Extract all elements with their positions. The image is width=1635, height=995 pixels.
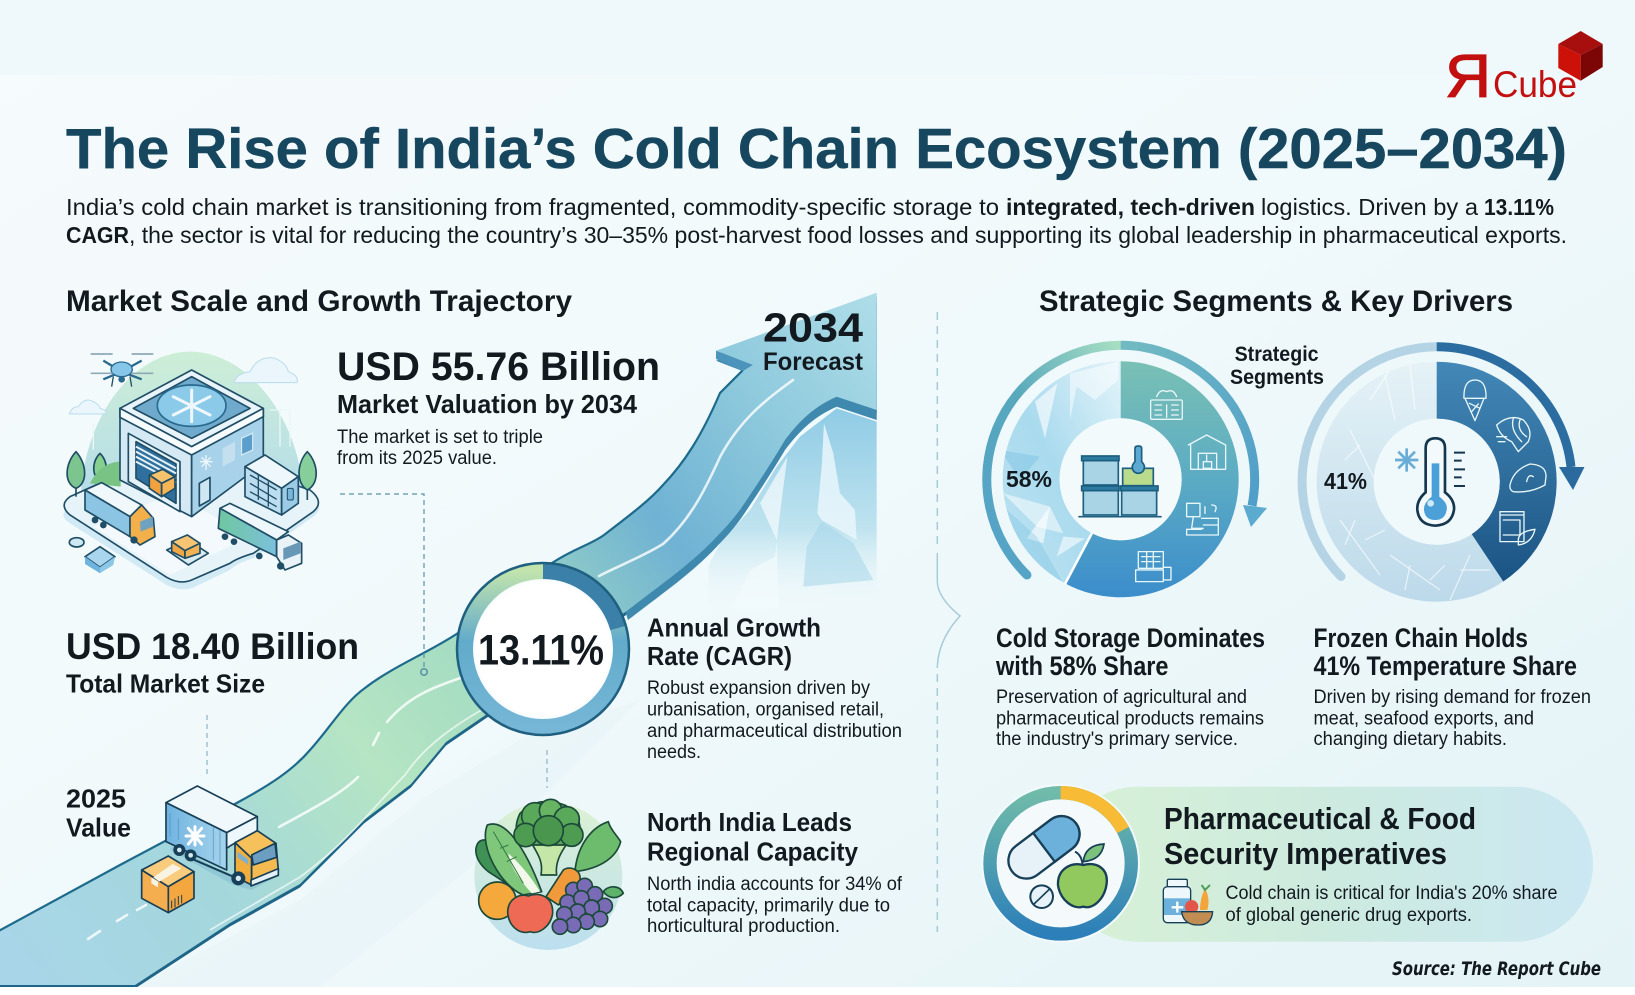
- wind turbines: [93, 410, 290, 450]
- text: cold storage dominates: Cold Storage Dominates: [996, 623, 1265, 653]
- text: frozen chain holds: changing dietary habits.: [1314, 729, 1507, 750]
- pallet boxes: [167, 535, 208, 565]
- top band: [0, 0, 1635, 75]
- truck right: [218, 503, 302, 570]
- callout: USD 55.76 Billion: USD 55.76 Billion: [337, 345, 660, 389]
- text: north india: total capacity, primarily due to: [647, 896, 890, 916]
- road edge lower: [0, 296, 877, 988]
- outer arc left: [987, 345, 1121, 575]
- orange: [479, 882, 516, 919]
- left leaves: [476, 824, 542, 895]
- text: north india: North India Leads: [647, 807, 852, 837]
- truck: [166, 786, 278, 890]
- road centre line: [88, 380, 793, 939]
- growth road arrow: [0, 293, 877, 988]
- parcel: [142, 856, 194, 913]
- apple: [508, 895, 553, 932]
- arc arrowhead: [1243, 505, 1267, 527]
- pharma body text: [1226, 883, 1558, 926]
- pharma body text: of global generic drug exports.: [1226, 905, 1472, 926]
- intro paragraph: 13.11%: [1484, 194, 1554, 220]
- illustration: truck and parcel: [142, 786, 278, 913]
- logo: [1445, 31, 1603, 110]
- pill background: [1060, 787, 1593, 942]
- arrow wing fold: [716, 351, 753, 371]
- intro paragraph: [66, 194, 1567, 248]
- text: annual growth rate: Annual Growth: [647, 612, 821, 642]
- illustration: fruit and vegetables: [474, 799, 623, 950]
- icons: frozen products: [1464, 380, 1546, 545]
- callout: USD 55.76 Billion: Market Valuation by 2034: [337, 389, 638, 419]
- pharma heading: [1164, 801, 1476, 871]
- ring upper-right arc: [543, 571, 618, 628]
- label: strategic segments: Strategic: [1235, 343, 1319, 366]
- text: north india: North india accounts for 34% of: [647, 874, 903, 895]
- centre disc: [1374, 419, 1500, 545]
- text: north india: Regional Capacity: [647, 836, 858, 866]
- road surface: [0, 293, 877, 985]
- callout: USD 55.76 Billion: [337, 345, 660, 469]
- text: cold storage dominates: Preservation of agricultural and: [996, 687, 1247, 708]
- divider between columns: [937, 312, 960, 932]
- ice mountains behind arrow: [708, 408, 877, 610]
- icon: bottle and bowl: [1163, 879, 1213, 925]
- connector: 2025 value: [206, 715, 208, 776]
- logo wordmark: Я: [1445, 43, 1491, 110]
- centre disc: [1060, 418, 1182, 540]
- text: annual growth rate: [647, 612, 902, 763]
- truck left: [85, 483, 155, 545]
- icon: capsule: [1001, 809, 1087, 886]
- broccoli: [514, 799, 583, 875]
- callout: USD 18.40 Billion: Total Market Size: [66, 668, 265, 698]
- dome backdrop: [81, 352, 303, 503]
- pill icon ring: [981, 784, 1140, 943]
- ring band: [465, 571, 621, 727]
- backdrop circle: [474, 802, 622, 950]
- grapes: [552, 878, 612, 934]
- callout: USD 18.40 Billion: USD 18.40 Billion: [66, 626, 359, 667]
- outer arc right: [1437, 347, 1571, 467]
- percentage label: 41%: [1324, 468, 1367, 494]
- road top edge line: [0, 370, 743, 933]
- text: cold storage dominates: the industry's primary service.: [996, 729, 1238, 750]
- segment gap: [1065, 533, 1092, 584]
- platform: [63, 450, 319, 589]
- label: strategic segments: Segments: [1230, 366, 1324, 389]
- grape leaf: [603, 887, 623, 898]
- text: frozen chain holds: 41% Temperature Share: [1314, 651, 1577, 681]
- icon: apple: [1058, 844, 1107, 907]
- donut: frozen chain: [1302, 347, 1584, 605]
- label: 2025 value: Value: [66, 812, 131, 842]
- label: 2034 forecast: Forecast: [763, 348, 864, 376]
- carrot: [546, 868, 580, 905]
- building: [120, 370, 263, 517]
- text: annual growth rate: Robust expansion driven by: [647, 678, 870, 699]
- pharma heading: Pharmaceutical & Food: [1164, 801, 1476, 836]
- text: north india: [647, 807, 903, 937]
- logo wordmark: [1445, 43, 1577, 110]
- label: strategic segments: [1230, 343, 1324, 389]
- ring outer outline: [457, 563, 629, 735]
- illustration: cold storage warehouse: [63, 352, 319, 589]
- annex unit: [245, 455, 298, 515]
- connector: ring to produce: [546, 750, 548, 788]
- arc arrowhead: [1559, 467, 1584, 490]
- connector: 2034 callout to road: [340, 494, 427, 675]
- heading: strategic segments: Strategic Segments & Key Drivers: [1039, 285, 1513, 318]
- label: 2034 forecast: [763, 304, 864, 376]
- segment: frost 58%: [1002, 362, 1120, 583]
- donut: cold storage: [987, 345, 1267, 600]
- callout: USD 55.76 Billion: from its 2025 value.: [337, 448, 497, 469]
- trees: [67, 452, 316, 500]
- pharma body text: Cold chain is critical for India's 20% share: [1226, 883, 1558, 904]
- intro paragraph: CAGR: [66, 222, 129, 248]
- label: 2025 value: 2025: [66, 784, 126, 814]
- drone: [91, 354, 153, 387]
- intro paragraph: integrated, tech-driven: [1006, 194, 1255, 220]
- text: cold storage dominates: with 58% Share: [995, 651, 1168, 681]
- text: cold storage dominates: pharmaceutical products remains: [996, 708, 1264, 730]
- icon: thermometer and snowflake: [1395, 438, 1465, 526]
- right leaf: [575, 822, 621, 872]
- icons: stored goods: [1136, 391, 1226, 582]
- percentage label: 58%: [1006, 466, 1052, 492]
- text: frozen chain holds: [1314, 623, 1591, 750]
- ring value: 13.11%: [478, 626, 604, 674]
- bottom white strip: [0, 987, 1635, 995]
- road edge highlight: [210, 705, 490, 930]
- text: annual growth rate: needs.: [647, 742, 701, 763]
- text: annual growth rate: and pharmaceutical distribution: [647, 721, 902, 742]
- icon: storage crates: [1078, 446, 1162, 517]
- icon: tablet: [1030, 885, 1053, 908]
- title: The Rise of India’s Cold Chain Ecosystem (2025–2034): [66, 117, 1567, 181]
- panel: pharmaceutical and food security: [981, 784, 1593, 943]
- label: 2025 value: [66, 784, 131, 842]
- intro paragraph: , the sector is vital for reducing the country’s 30–35% post-harvest food losses and supporting its global leadership in pharmaceutical exports.: [129, 222, 1567, 248]
- logo wordmark: Cube: [1493, 64, 1577, 105]
- text: frozen chain holds: Frozen Chain Holds: [1314, 623, 1528, 653]
- intro paragraph: India’s cold chain market is transitioning from fragmented, commodity-specific storage to: [66, 194, 999, 220]
- callout: USD 18.40 Billion: [66, 626, 359, 698]
- heading: market scale: Market Scale and Growth Trajectory: [66, 285, 572, 318]
- label: 2034 forecast: 2034: [763, 304, 863, 350]
- pharma heading: Security Imperatives: [1164, 836, 1447, 871]
- road edge upper 3D band: [604, 303, 877, 620]
- text: north india: horticultural production.: [647, 916, 840, 937]
- segment: teal cold storage: [1065, 361, 1239, 597]
- callout: USD 55.76 Billion: The market is set to triple: [337, 427, 543, 448]
- outer arc right: [1121, 345, 1255, 506]
- text: annual growth rate: Rate (CAGR): [647, 641, 792, 671]
- road shadow: [135, 700, 640, 987]
- text: frozen chain holds: Driven by rising demand for frozen: [1314, 687, 1591, 708]
- segment: dark frozen: [1437, 362, 1557, 582]
- text: frozen chain holds: meat, seafood exports, and: [1314, 708, 1534, 730]
- logo cube: [1558, 31, 1603, 81]
- intro paragraph: logistics. Driven by a: [1261, 194, 1478, 220]
- ice cube and coin: [69, 538, 115, 573]
- outer arc left: [1302, 347, 1437, 576]
- text: annual growth rate: urbanisation, organised retail,: [647, 700, 884, 720]
- segment: frost 41%: [1316, 362, 1503, 602]
- CAGR ring: [457, 563, 629, 735]
- text: cold storage dominates: [995, 623, 1265, 750]
- clouds: [69, 358, 297, 414]
